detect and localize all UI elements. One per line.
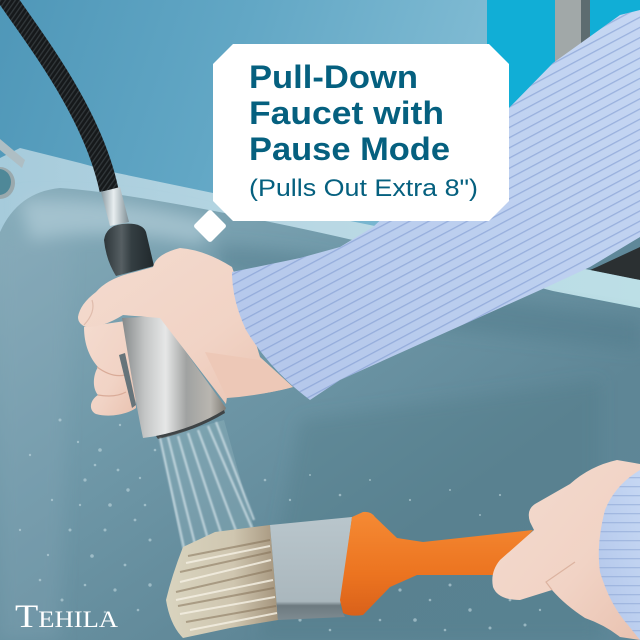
hand holding spray head bbox=[78, 248, 293, 404]
sink rim bbox=[0, 148, 640, 320]
sweater sleeve on left arm bbox=[232, 10, 640, 400]
faucet handle on sink deck bbox=[0, 139, 25, 199]
hose connector bbox=[101, 187, 129, 226]
hand holding brush bbox=[492, 460, 640, 640]
basin shading bbox=[0, 199, 640, 640]
callout card bbox=[213, 44, 509, 221]
card background bbox=[213, 44, 509, 221]
brush orange handle bbox=[340, 512, 533, 616]
heading bbox=[249, 59, 450, 167]
callout pointer diamond bbox=[193, 209, 227, 243]
teal panel and metal post behind sink bbox=[487, 0, 640, 280]
subheading: (Pulls Out Extra 8") bbox=[249, 175, 478, 202]
heading: Pull-Down bbox=[249, 59, 418, 95]
sleeve on right arm bbox=[599, 470, 640, 640]
heading: Pause Mode bbox=[249, 131, 450, 167]
brush metal ferrule bbox=[270, 517, 352, 620]
brush bristles bbox=[166, 525, 278, 638]
black spray head collar bbox=[104, 224, 154, 276]
brand logo: TEHILA bbox=[15, 599, 118, 635]
water streams bbox=[160, 420, 254, 550]
back fingers bbox=[84, 320, 136, 416]
heading: Faucet with bbox=[249, 95, 444, 131]
sink basin bbox=[0, 188, 640, 640]
stainless steel spray head bbox=[122, 316, 226, 439]
wall background bbox=[0, 0, 488, 300]
paint brush bbox=[166, 512, 533, 638]
water droplets on basin bbox=[19, 418, 541, 631]
hose bbox=[4, 0, 109, 190]
